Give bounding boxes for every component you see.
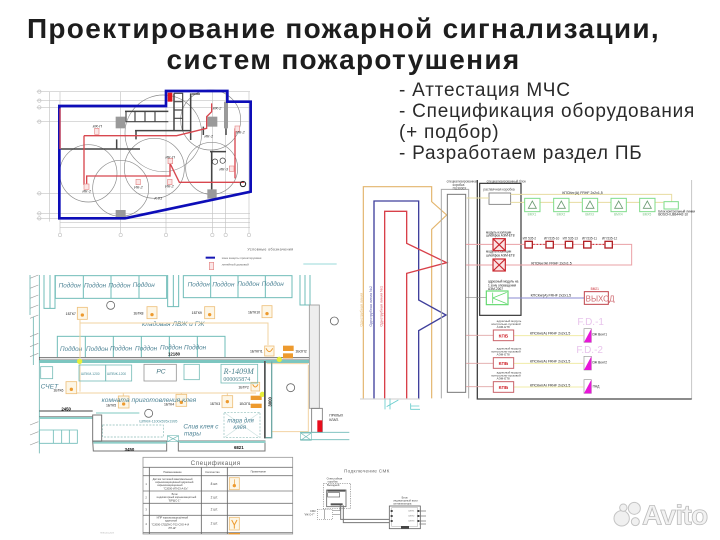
floor plan drawing: ИК-3	[219, 167, 229, 172]
schematic drawing: ИП 535-2	[523, 237, 536, 241]
warehouse plan drawing: Поддон	[108, 282, 131, 290]
SMK connection diagram: Выходной	[327, 483, 340, 487]
schematic drawing: ОЖ Вент2	[592, 361, 607, 365]
schematic drawing: ОЖ Вент1	[592, 333, 607, 337]
schematic drawing: ВЫХОД	[586, 294, 615, 303]
legend of floor plan: Условные обозначения	[247, 248, 294, 252]
floor plan drawing: ИК-П	[165, 155, 175, 160]
magenta dampers	[584, 329, 591, 393]
warehouse plan drawing	[30, 275, 349, 453]
SMK connection diagram	[304, 469, 426, 529]
specification table: 1	[145, 482, 147, 486]
schematic drawing: контрольно-пусковой	[491, 322, 521, 326]
specification table: 4	[145, 522, 147, 526]
warehouse plan drawing: 000065874	[223, 377, 250, 383]
warehouse plan drawing: СЧЕТ	[41, 383, 59, 390]
warehouse plan drawing: 3000	[268, 396, 273, 407]
schematic drawing: КПБ	[499, 385, 509, 390]
specification table: Блок	[172, 492, 178, 496]
schematic drawing: ИП 535-11	[582, 237, 597, 241]
schematic drawing: распаячная коробка	[483, 188, 515, 192]
legend of floor plan: линейный дымовой	[222, 263, 249, 267]
specification table: 3	[145, 507, 147, 511]
warehouse plan drawing: 3450	[125, 447, 135, 452]
teal wall band	[39, 357, 309, 360]
floor plan drawing: ИК-2	[82, 189, 92, 194]
schematic drawing: АЭМ-2007	[488, 287, 503, 291]
specification table: Спецификация	[191, 460, 241, 467]
specification table: 8 шт.	[211, 482, 218, 486]
warehouse plan drawing: 1БТК5	[106, 403, 116, 407]
services list	[399, 80, 695, 164]
schematic drawing: АЭМ-ЕТ8	[497, 376, 510, 380]
services list: - Аттестация МЧС	[399, 80, 571, 101]
blue perimeter	[59, 91, 251, 218]
specification table: ЛП-Ш"	[168, 526, 176, 530]
lower walls	[265, 362, 272, 438]
services list: (+ подбор)	[399, 122, 499, 143]
schematic drawing: КПСКнг(А) FRHF 2х2х1,5	[530, 360, 570, 364]
title: систем пожаротушения	[166, 44, 521, 75]
vertical cable channel	[441, 189, 469, 398]
SMK connection diagram: сигнализатора	[393, 502, 412, 505]
specification table	[100, 457, 293, 535]
warehouse plan drawing: Поддон	[160, 344, 183, 352]
schematic drawing: адресный модуль на	[488, 280, 519, 284]
warehouse plan drawing: 1БТК6	[53, 388, 64, 392]
SMK connection diagram: ШЛУ2	[408, 515, 415, 517]
legend of floor plan	[206, 248, 337, 270]
title: Проектирование пожарной сигнализации,	[27, 13, 660, 44]
floor plan drawing: ИК-2	[204, 133, 214, 138]
specification table: 2 шт.	[211, 496, 218, 500]
specification table: 2 шт.	[211, 508, 218, 512]
schematic drawing: модуль изоляции	[486, 230, 512, 234]
specification table: 2	[145, 495, 147, 499]
schematic drawing: ПНД	[593, 384, 600, 388]
floor plan drawing: К.01	[154, 195, 162, 200]
schematic drawing: КПБ	[499, 333, 509, 338]
warehouse plan drawing: 1БТК4	[164, 403, 174, 407]
schematic drawing: ИП 535-10	[544, 237, 559, 241]
warehouse plan drawing: Поддон	[110, 344, 133, 352]
warehouse plan drawing: 1БТК10	[248, 311, 260, 315]
specification table: взрывозащищённый адресный	[155, 480, 194, 484]
floor plan drawing: ИК-П	[93, 124, 102, 129]
SMK connection diagram: СМК	[310, 509, 316, 513]
warehouse plan drawing: Поддон	[184, 344, 207, 352]
outer frame	[477, 180, 692, 399]
schematic drawing: модуль изоляции	[486, 250, 512, 254]
floor plan drawing	[37, 90, 251, 237]
schematic drawing: ВМХ5	[643, 212, 652, 216]
schematic drawing: 1 зону оповещения	[488, 283, 516, 287]
right wall and red panel	[309, 305, 319, 408]
schematic drawing: F.D.-1	[577, 317, 604, 328]
warehouse plan drawing: Поддон	[84, 282, 107, 290]
detectors	[66, 306, 274, 408]
floor plan drawing: ИК-2	[236, 130, 246, 135]
specification table: взрывозащищенный	[157, 483, 183, 487]
schematic drawing: КПСКнг(А) FRHF 2х2х1,5	[530, 332, 570, 336]
warehouse plan drawing: Слив клея с	[183, 423, 219, 430]
services list: - Спецификация оборудования	[399, 101, 695, 122]
warehouse plan drawing: тара для	[227, 418, 255, 424]
schematic drawing	[360, 180, 695, 409]
red alarm loop	[60, 103, 244, 185]
riser labels: Однотрубная линия	[360, 293, 364, 327]
schematic drawing: ГШ3000Х	[453, 186, 467, 190]
warehouse plan drawing: 12180	[168, 352, 181, 357]
schematic drawing: шлейфов АЭМ-ЕТ8	[486, 234, 515, 238]
schematic drawing: шлейфов АЭМ-ЕТ8	[486, 253, 515, 257]
room equipment	[41, 364, 258, 383]
riser labels	[360, 286, 384, 327]
warehouse plan drawing: 1БТК9	[192, 311, 202, 315]
warehouse plan drawing: Поддон	[262, 280, 284, 288]
schematic drawing: контрольно-пусковой	[491, 350, 521, 354]
warehouse plan drawing: 6821	[234, 445, 244, 450]
warehouse plan drawing: R-1409M	[223, 367, 255, 376]
SMK connection diagram: "ИК-О-Г"	[304, 513, 315, 517]
schematic drawing: Блок контрольный линии	[658, 209, 695, 213]
services list: - Разработаем раздел ПБ	[399, 143, 643, 164]
schematic drawing: ИП 535-12	[602, 237, 617, 241]
schematic drawing: контрольно-пусковой	[491, 373, 521, 377]
warehouse plan drawing: 1БОП1	[239, 402, 251, 406]
hatched wall	[30, 275, 38, 445]
Avito watermark	[614, 499, 708, 530]
specification table: индикаторный взрывозащитный	[157, 495, 197, 499]
schematic drawing: F.D.-2	[576, 345, 603, 356]
schematic drawing: специализированный блок	[487, 180, 526, 184]
schematic drawing: ВМХ4	[614, 212, 623, 216]
warehouse plan drawing: клея	[233, 425, 247, 431]
pallet racks	[44, 275, 310, 358]
warehouse plan drawing: Поддон	[59, 282, 81, 290]
SMK connection diagram: ШЛУ3	[408, 520, 415, 522]
warehouse plan drawing: 1БОП2	[295, 349, 307, 353]
specification table: "С2000-ИП-03-А-Ех"	[163, 486, 188, 490]
red isolators and loop	[466, 244, 632, 265]
inner box	[480, 183, 521, 315]
specification table: адресный	[165, 519, 178, 523]
SMK connection diagram: Блок	[402, 495, 408, 499]
green module and exit sign	[465, 296, 487, 298]
warehouse plan drawing: ШПКМ-1100х595х1995	[139, 419, 177, 423]
floor plan drawing: ИК-2	[165, 184, 175, 189]
warehouse plan drawing: Поддон	[133, 281, 155, 289]
schematic drawing: BOSCH LBB4442-10	[658, 213, 688, 217]
warehouse plan drawing: 1БТК7	[66, 312, 76, 316]
green sounders	[467, 194, 672, 202]
specification table: Количество	[205, 470, 220, 474]
specification table: Датчик тепловой максимальный	[153, 477, 193, 481]
warehouse plan drawing: 1БТКП1	[250, 349, 263, 353]
schematic drawing: адресный модуль	[497, 370, 522, 374]
schematic drawing: ВМХ3	[585, 212, 594, 216]
SMK connection diagram: ШЛУ1	[408, 510, 415, 512]
logo text: Avito	[642, 499, 708, 530]
warehouse plan drawing: 1БТР2	[238, 385, 249, 389]
specification table: "БРШС-1"	[168, 498, 181, 502]
room marks	[107, 301, 338, 417]
schematic drawing: АЭМ-ЕТ8	[497, 325, 510, 329]
warehouse plan drawing: Поддон	[135, 344, 158, 352]
SMK connection diagram: Подключение СМК	[344, 469, 390, 474]
schematic drawing: КПСКнг(А) FRHF 2х2х1,5	[531, 294, 571, 298]
schematic drawing: адресный модуль	[497, 319, 522, 323]
detector lines	[72, 320, 308, 432]
schematic drawing: адресный модуль	[497, 346, 522, 350]
schematic drawing: КПБ	[499, 361, 509, 366]
specification table: 2 шт.	[211, 521, 218, 525]
schematic drawing: КПСКнг(А) FRHF 2х2х1,5	[562, 191, 603, 195]
schematic drawing: коробка	[453, 183, 465, 187]
icon: Avito circles	[614, 502, 640, 526]
legend of floor plan: зона защиты проектируемая	[222, 256, 262, 260]
KPB modules	[466, 335, 493, 387]
floor plan drawing: ИК-2	[213, 105, 222, 110]
schematic drawing: КПСКнг(А) FRHF 2х2х1,5	[531, 262, 572, 266]
riser labels: Однотрубная линия №1	[380, 286, 384, 327]
warehouse plan drawing: ШПКМ-1200	[81, 372, 100, 376]
schematic drawing: ВМ21	[591, 287, 599, 291]
warehouse plan drawing: ПРКЛЫХ	[329, 413, 344, 417]
warehouse plan drawing: РС	[156, 368, 166, 375]
SMK connection diagram: Огнестойкая	[327, 476, 343, 480]
specification table: "С2000-СПДЭУС-Т02-СХО-4-И	[151, 522, 189, 526]
schematic drawing: специализированная	[447, 180, 478, 184]
schematic drawing: ИП 535-13	[563, 237, 578, 241]
SMK connection diagram: индикаторный выхл	[393, 499, 418, 503]
warehouse plan drawing: Поддон	[212, 281, 235, 289]
warehouse plan drawing: тары	[184, 431, 201, 438]
warehouse plan drawing: ШПВЖ-1200	[107, 372, 126, 376]
warehouse plan drawing: 2450	[61, 406, 72, 411]
specification table: ПОЖ-001-2023	[100, 533, 115, 535]
warehouse plan drawing: КЛАП.	[329, 418, 339, 422]
warehouse plan drawing: комната приготовления клея	[102, 397, 197, 404]
specification table: ИПР взрывозащищённый	[157, 516, 189, 520]
schematic drawing: АЭМ-ЕТ8	[497, 353, 510, 357]
SMK connection diagram: коробка	[328, 479, 338, 483]
warehouse plan drawing: 1БТК3	[210, 402, 220, 406]
warehouse plan drawing: 1БТК8	[133, 311, 144, 315]
warehouse plan drawing: Поддон	[237, 280, 260, 288]
warehouse plan drawing: Поддон	[86, 345, 109, 353]
interior walls	[61, 93, 226, 192]
specification table: Наименование	[163, 470, 182, 474]
schematic drawing: КПСКнг(А) FRHF 2х2х1,5	[530, 384, 570, 388]
warehouse plan drawing: кладовая ЛВЖ и ГЖ	[142, 320, 205, 328]
risers	[363, 187, 447, 398]
title	[27, 13, 660, 75]
specification table: Примечание	[251, 469, 267, 473]
schematic drawing: ВМХ1	[528, 212, 537, 216]
warehouse plan drawing: Поддон	[60, 345, 83, 353]
schematic drawing: ВМХ2	[557, 212, 566, 216]
warehouse plan drawing: 4949	[315, 365, 320, 375]
floor plan drawing: ИК-2	[134, 184, 144, 189]
warehouse plan drawing: Поддон	[188, 281, 210, 289]
riser labels: Однотрубная линия №2	[369, 286, 373, 327]
